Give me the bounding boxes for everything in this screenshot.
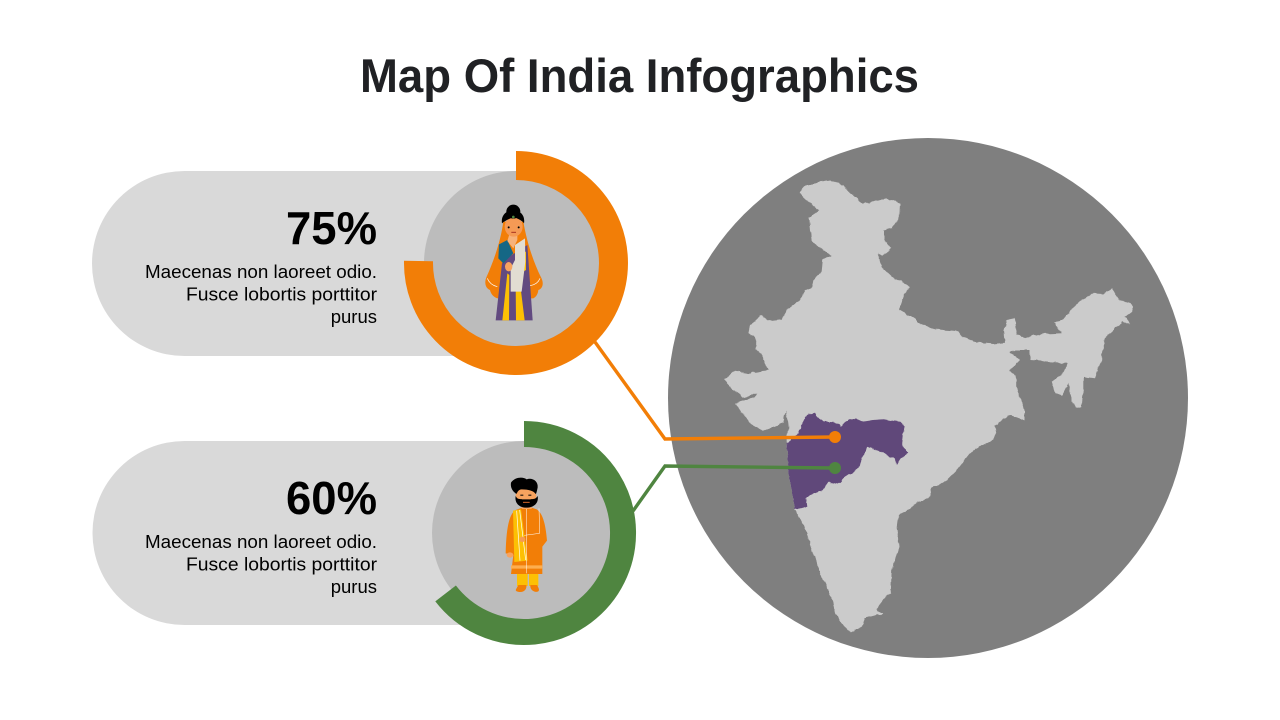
description [145,531,377,597]
description line 1: Maecenas non laoreet odio. [145,261,377,282]
inner circle [424,171,608,355]
icon: man in kurta [506,478,547,592]
description [145,261,377,327]
connector: orange line [595,342,841,443]
orange marker dot [829,431,841,443]
pill background [92,171,516,356]
description line 2: Fusce lobortis porttitor [186,284,377,304]
description line 2: Fusce lobortis porttitor [186,554,377,574]
highlighted state: Maharashtra [786,413,908,509]
map of India [724,181,1132,632]
percentage: 75% [286,202,377,254]
green progress ring [446,434,623,632]
description line 3: purus [331,576,377,597]
title: Map Of India Infographics [360,49,919,102]
inner circle [432,441,616,625]
description line 3: purus [331,306,377,327]
connector: green line [633,462,841,511]
percentage: 60% [286,472,377,524]
panel: globe map of India [668,138,1188,658]
panel: 60 percent [92,434,623,632]
green marker dot [829,462,841,474]
icon: woman in sari [485,205,543,320]
pill background [92,441,524,625]
panel: 75 percent [92,166,613,360]
orange progress ring [418,166,613,360]
description line 1: Maecenas non laoreet odio. [145,531,377,552]
globe circle [668,138,1188,658]
country outline [724,181,1132,632]
